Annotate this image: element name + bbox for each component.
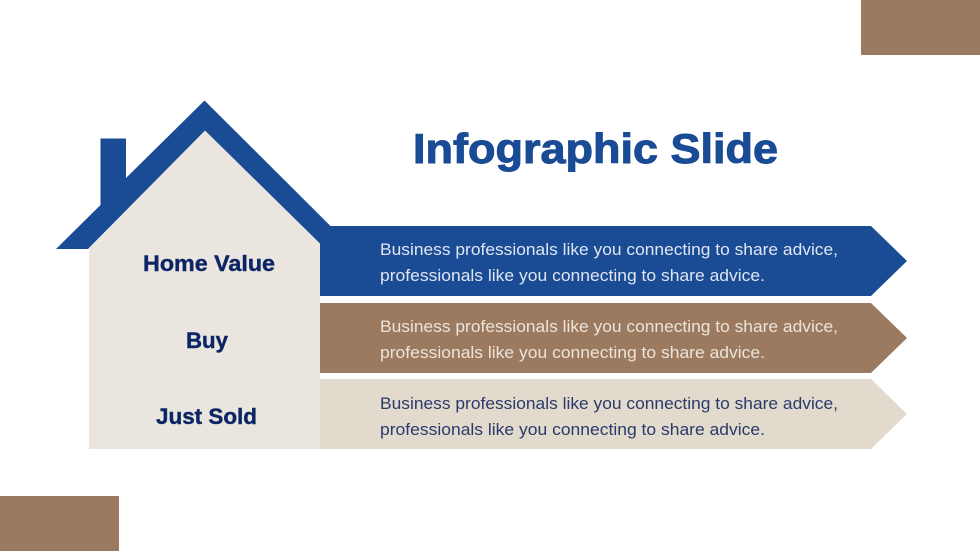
label: just sold: Just Sold — [156, 404, 257, 429]
arrow: home value: Business professionals like you connecting to share advice, — [380, 240, 838, 259]
arrow: buy: Business professionals like you connecting to share advice, — [380, 317, 838, 336]
bottom left corner block — [0, 496, 119, 551]
title: Infographic Slide — [413, 125, 778, 172]
roof and chimney — [56, 100, 331, 249]
label: buy: Buy — [186, 328, 228, 353]
arrow: buy — [320, 303, 907, 373]
arrow: buy: professionals like you connecting to share advice. — [380, 343, 765, 362]
arrow: just sold — [320, 379, 907, 449]
arrow: home value: professionals like you connecting to share advice. — [380, 266, 765, 285]
arrow: just sold: Business professionals like you connecting to share advice, — [380, 394, 838, 413]
house body — [89, 130, 320, 449]
label: home value: Home Value — [143, 251, 275, 276]
top right corner block — [861, 0, 980, 55]
house icon — [56, 100, 331, 449]
arrow: just sold: professionals like you connecting to share advice. — [380, 420, 765, 439]
arrow: home value — [320, 226, 907, 296]
